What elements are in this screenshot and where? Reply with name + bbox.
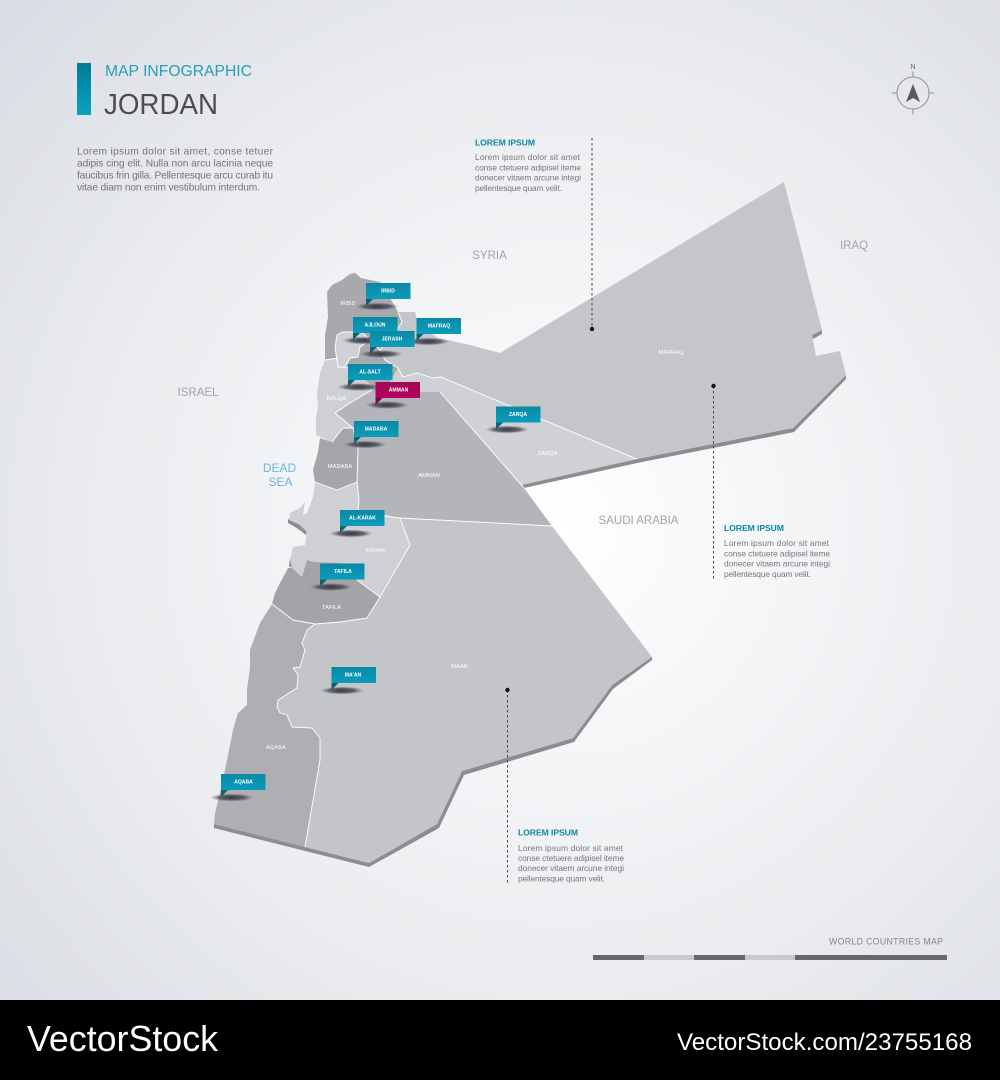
region labels: ZARQA	[538, 451, 558, 457]
pin: Al-Salt	[337, 364, 392, 391]
region labels: AQABA	[266, 745, 286, 751]
pin: Al-Karak: AL-KARAK	[349, 516, 376, 522]
callout: right: donecer vitaem arcune integi	[724, 558, 830, 568]
pin: Al-Karak	[329, 510, 384, 538]
title block	[77, 63, 252, 121]
pin: Aqaba	[210, 774, 266, 802]
scale bar	[593, 936, 947, 960]
callout: top: pellentesque quam velit.	[475, 183, 562, 193]
pin: Tafila	[309, 564, 364, 591]
icon: compass: N	[910, 64, 916, 71]
pin: Amman	[365, 382, 420, 409]
scale bar: WORLD COUNTRIES MAP	[829, 936, 943, 946]
pin: Jerash: JERASH	[382, 337, 403, 343]
region: Balqa	[316, 358, 372, 442]
pin: Maan: MA'AN	[345, 673, 362, 679]
pin: Zarqa	[485, 406, 540, 434]
title: JORDAN	[104, 89, 218, 121]
region labels: AMMAN	[418, 473, 440, 479]
region: Zarqa	[372, 362, 637, 485]
callout: right: conse ctetuere adipisel iteme	[724, 548, 830, 558]
region labels: MADABA	[328, 464, 352, 470]
title accent bar	[77, 63, 91, 115]
region labels: IRBID	[340, 301, 356, 307]
region: Amman	[335, 390, 552, 526]
pin: Jerash	[359, 331, 414, 358]
callout: bottom: pellentesque quam velit.	[518, 874, 605, 884]
pin: Zarqa: ZARQA	[509, 412, 527, 418]
region: Tafila	[272, 560, 380, 624]
map of Jordan	[214, 182, 846, 867]
region: Irbid	[325, 273, 402, 360]
pin: Tafila: TAFILA	[334, 569, 352, 575]
region labels: MAAN	[451, 664, 468, 670]
callout: bottom: donecer vitaem arcune integi	[518, 863, 624, 873]
intro paragraph: adipis cing elit. Nulla non arcu lacinia neque	[77, 158, 273, 170]
region labels: BALQA	[327, 396, 346, 402]
callout: bottom: LOREM IPSUM	[518, 828, 578, 838]
intro paragraph: Lorem ipsum dolor sit amet, conse tetuer	[77, 146, 274, 158]
country labels: IRAQ	[840, 240, 868, 252]
region: Maan	[277, 518, 652, 863]
region: Ajloun	[335, 332, 370, 367]
region: Mafraq	[380, 182, 846, 459]
region: Karak	[289, 482, 410, 597]
sea label: DEAD	[263, 461, 297, 475]
pin: Ajloun: AJLOUN	[365, 323, 386, 329]
region: Aqaba	[214, 604, 320, 847]
region labels: KARAK	[366, 548, 385, 554]
pin: Aqaba: AQABA	[234, 780, 253, 786]
callout: top	[475, 138, 594, 331]
region labels: MAFRAQ	[659, 350, 684, 356]
pin: Irbid	[355, 283, 410, 310]
region labels	[266, 301, 684, 751]
watermark footer: VectorStock.com/23755168	[677, 1029, 972, 1056]
watermark footer	[27, 1018, 972, 1059]
country labels: SAUDI ARABIA	[599, 515, 679, 527]
region: Jerash	[345, 340, 398, 392]
pin: Mafraq	[406, 318, 461, 346]
callout: bottom: Lorem ipsum dolor sit amet	[518, 843, 624, 853]
callout: right: Lorem ipsum dolor sit amet	[724, 538, 830, 548]
callout: bottom	[505, 688, 624, 884]
country labels: SYRIA	[472, 250, 507, 262]
pin: Mafraq: MAFRAQ	[428, 324, 450, 330]
country labels: ISRAEL	[178, 387, 219, 399]
callout: top: donecer vitaem arcune integi	[475, 172, 581, 182]
sea label: SEA	[268, 475, 293, 489]
callout: right	[711, 384, 830, 580]
watermark footer: VectorStock	[27, 1018, 219, 1059]
callout: top: Lorem ipsum dolor sit amet	[475, 152, 581, 162]
callout: bottom: conse ctetuere adipisel iteme	[518, 853, 624, 863]
callout: top: conse ctetuere adipisel iteme	[475, 162, 581, 172]
pin: Ajloun	[342, 317, 398, 344]
callout: right: LOREM IPSUM	[724, 523, 784, 533]
callout: right: pellentesque quam velit.	[724, 569, 811, 579]
pin: Maan	[320, 667, 376, 694]
sea label	[263, 461, 297, 489]
icon: compass	[892, 64, 934, 114]
intro paragraph	[77, 146, 274, 194]
pin: Irbid: IRBID	[381, 289, 395, 295]
region: Madaba	[313, 428, 358, 490]
intro paragraph: faucibus frin gilla. Pellentesque arcu curab itu	[77, 170, 273, 182]
pin: Madaba	[343, 421, 398, 448]
pin: Amman: AMMAN	[389, 388, 409, 394]
pin: Madaba: MADABA	[365, 427, 388, 433]
intro paragraph: vitae diam non enim vestibulum interdum.	[77, 182, 260, 194]
country labels	[178, 240, 868, 527]
pin: Al-Salt: AL-SALT	[359, 370, 382, 376]
map extrusion edge	[214, 330, 846, 867]
subtitle: MAP INFOGRAPHIC	[105, 63, 252, 80]
callout: top: LOREM IPSUM	[475, 138, 535, 148]
region labels: TAFILA	[322, 605, 341, 611]
